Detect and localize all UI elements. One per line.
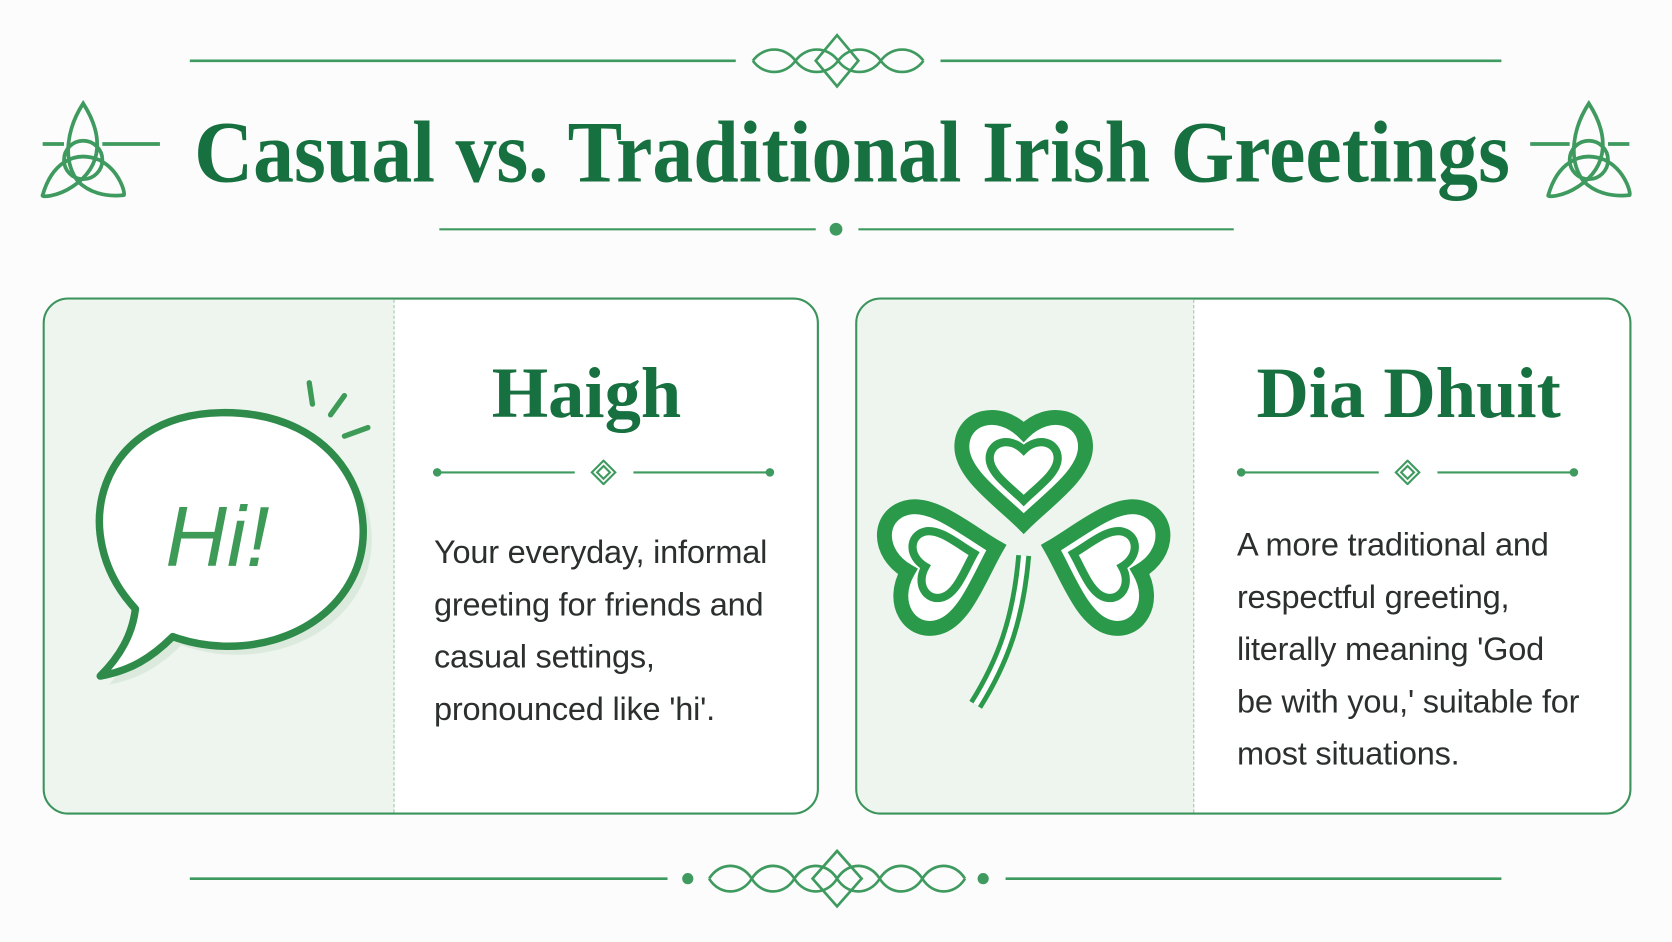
icon: shamrock bbox=[876, 410, 1170, 709]
text: Haigh description: pronounced like 'hi'. bbox=[434, 691, 715, 727]
text: Dia Dhuit description: be with you,' suitable for bbox=[1237, 684, 1579, 720]
text: Haigh description: greeting for friends and bbox=[434, 586, 763, 623]
text: Dia Dhuit description: literally meaning 'God bbox=[1237, 631, 1544, 668]
panel: Haigh bbox=[43, 298, 819, 815]
text: Haigh description: casual settings, bbox=[434, 639, 655, 675]
panel: Dia Dhuit bbox=[855, 298, 1631, 815]
top ornament bbox=[190, 35, 1501, 86]
text: Dia Dhuit description: most situations. bbox=[1237, 736, 1459, 772]
text: Dia Dhuit description: respectful greeting, bbox=[1237, 579, 1509, 615]
text: Dia Dhuit description bbox=[1237, 527, 1579, 772]
title: Casual vs. Traditional Irish Greetings bbox=[194, 103, 1510, 200]
icon: triquetra left bbox=[42, 103, 160, 196]
text: Haigh description bbox=[434, 534, 767, 727]
heading: Haigh: Haigh bbox=[492, 352, 681, 433]
text: Haigh description: Your everyday, informal bbox=[434, 534, 767, 570]
title underline bbox=[439, 224, 1234, 235]
text: Dia Dhuit description: A more traditional and bbox=[1237, 527, 1549, 563]
divider bbox=[432, 460, 774, 486]
bottom ornament bbox=[190, 851, 1501, 906]
icon: speech bubble Hi bbox=[96, 380, 372, 684]
heading: Dia Dhuit: Dia Dhuit bbox=[1257, 352, 1561, 433]
divider bbox=[1236, 460, 1578, 486]
icon: speech bubble Hi: Hi! bbox=[165, 490, 270, 585]
icon: triquetra right bbox=[1530, 103, 1630, 196]
